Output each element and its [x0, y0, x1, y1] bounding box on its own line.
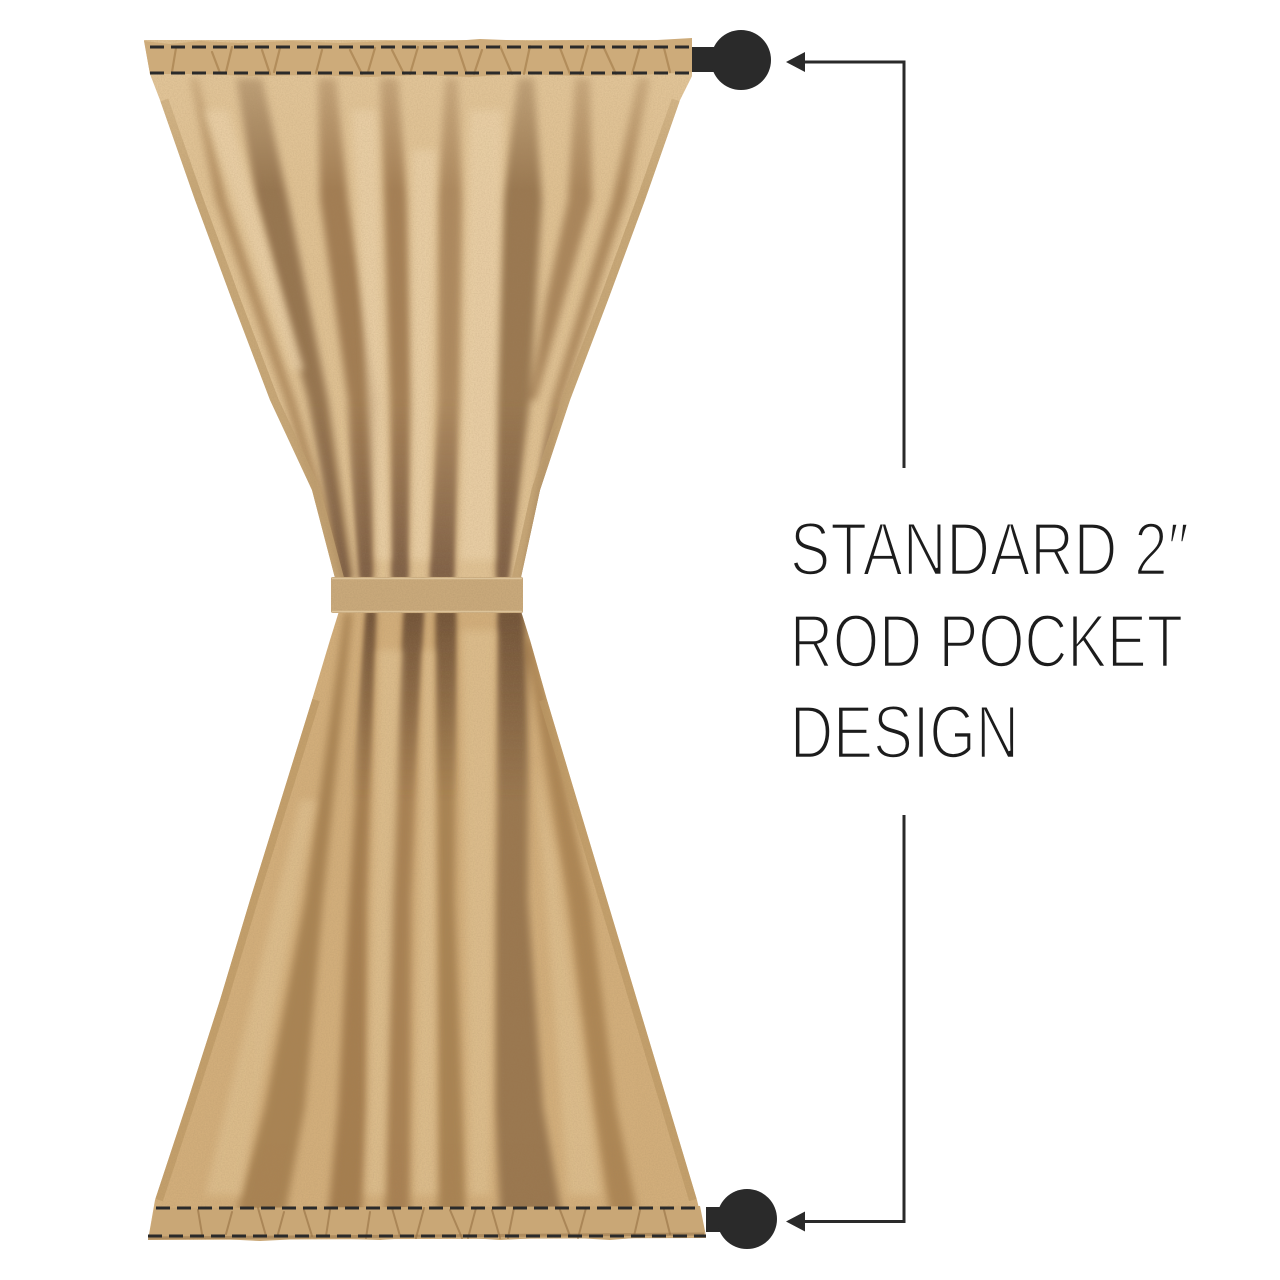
upper curtain panel [140, 36, 700, 584]
upper highlights [150, 74, 692, 170]
label: rod pocket design [790, 507, 1189, 774]
top bracket arrow [786, 52, 904, 468]
top rod pocket stitch lines [150, 47, 692, 73]
lower fold shadows [236, 612, 638, 1215]
tie-back band [331, 577, 523, 613]
upper fold shadows [190, 78, 650, 580]
bottom bracket arrow [786, 815, 904, 1232]
label: rod pocket design: DESIGN [790, 690, 1019, 774]
label: rod pocket design: STANDARD 2″ [790, 507, 1189, 591]
header pleat marks [172, 46, 670, 74]
label: rod pocket design: ROD POCKET [790, 599, 1183, 683]
waist gathers upper [316, 423, 552, 577]
bottom curtain rod finial [706, 1189, 777, 1249]
bottom rod pocket gathered header [148, 1206, 706, 1241]
top curtain rod finial [692, 30, 771, 90]
lower side hems [159, 700, 693, 1200]
bottom rod pocket stitch lines [148, 1208, 706, 1236]
curtain [140, 36, 715, 1246]
bottom pleat marks [198, 1208, 670, 1238]
waist gathers lower [355, 613, 526, 778]
top rod pocket gathered header [144, 38, 692, 77]
lower highlights [205, 630, 600, 1195]
bottom shadow line [148, 1234, 704, 1238]
infographic canvas [144, 30, 1186, 1249]
upper side hems [164, 100, 676, 580]
lower curtain panel [140, 606, 715, 1246]
